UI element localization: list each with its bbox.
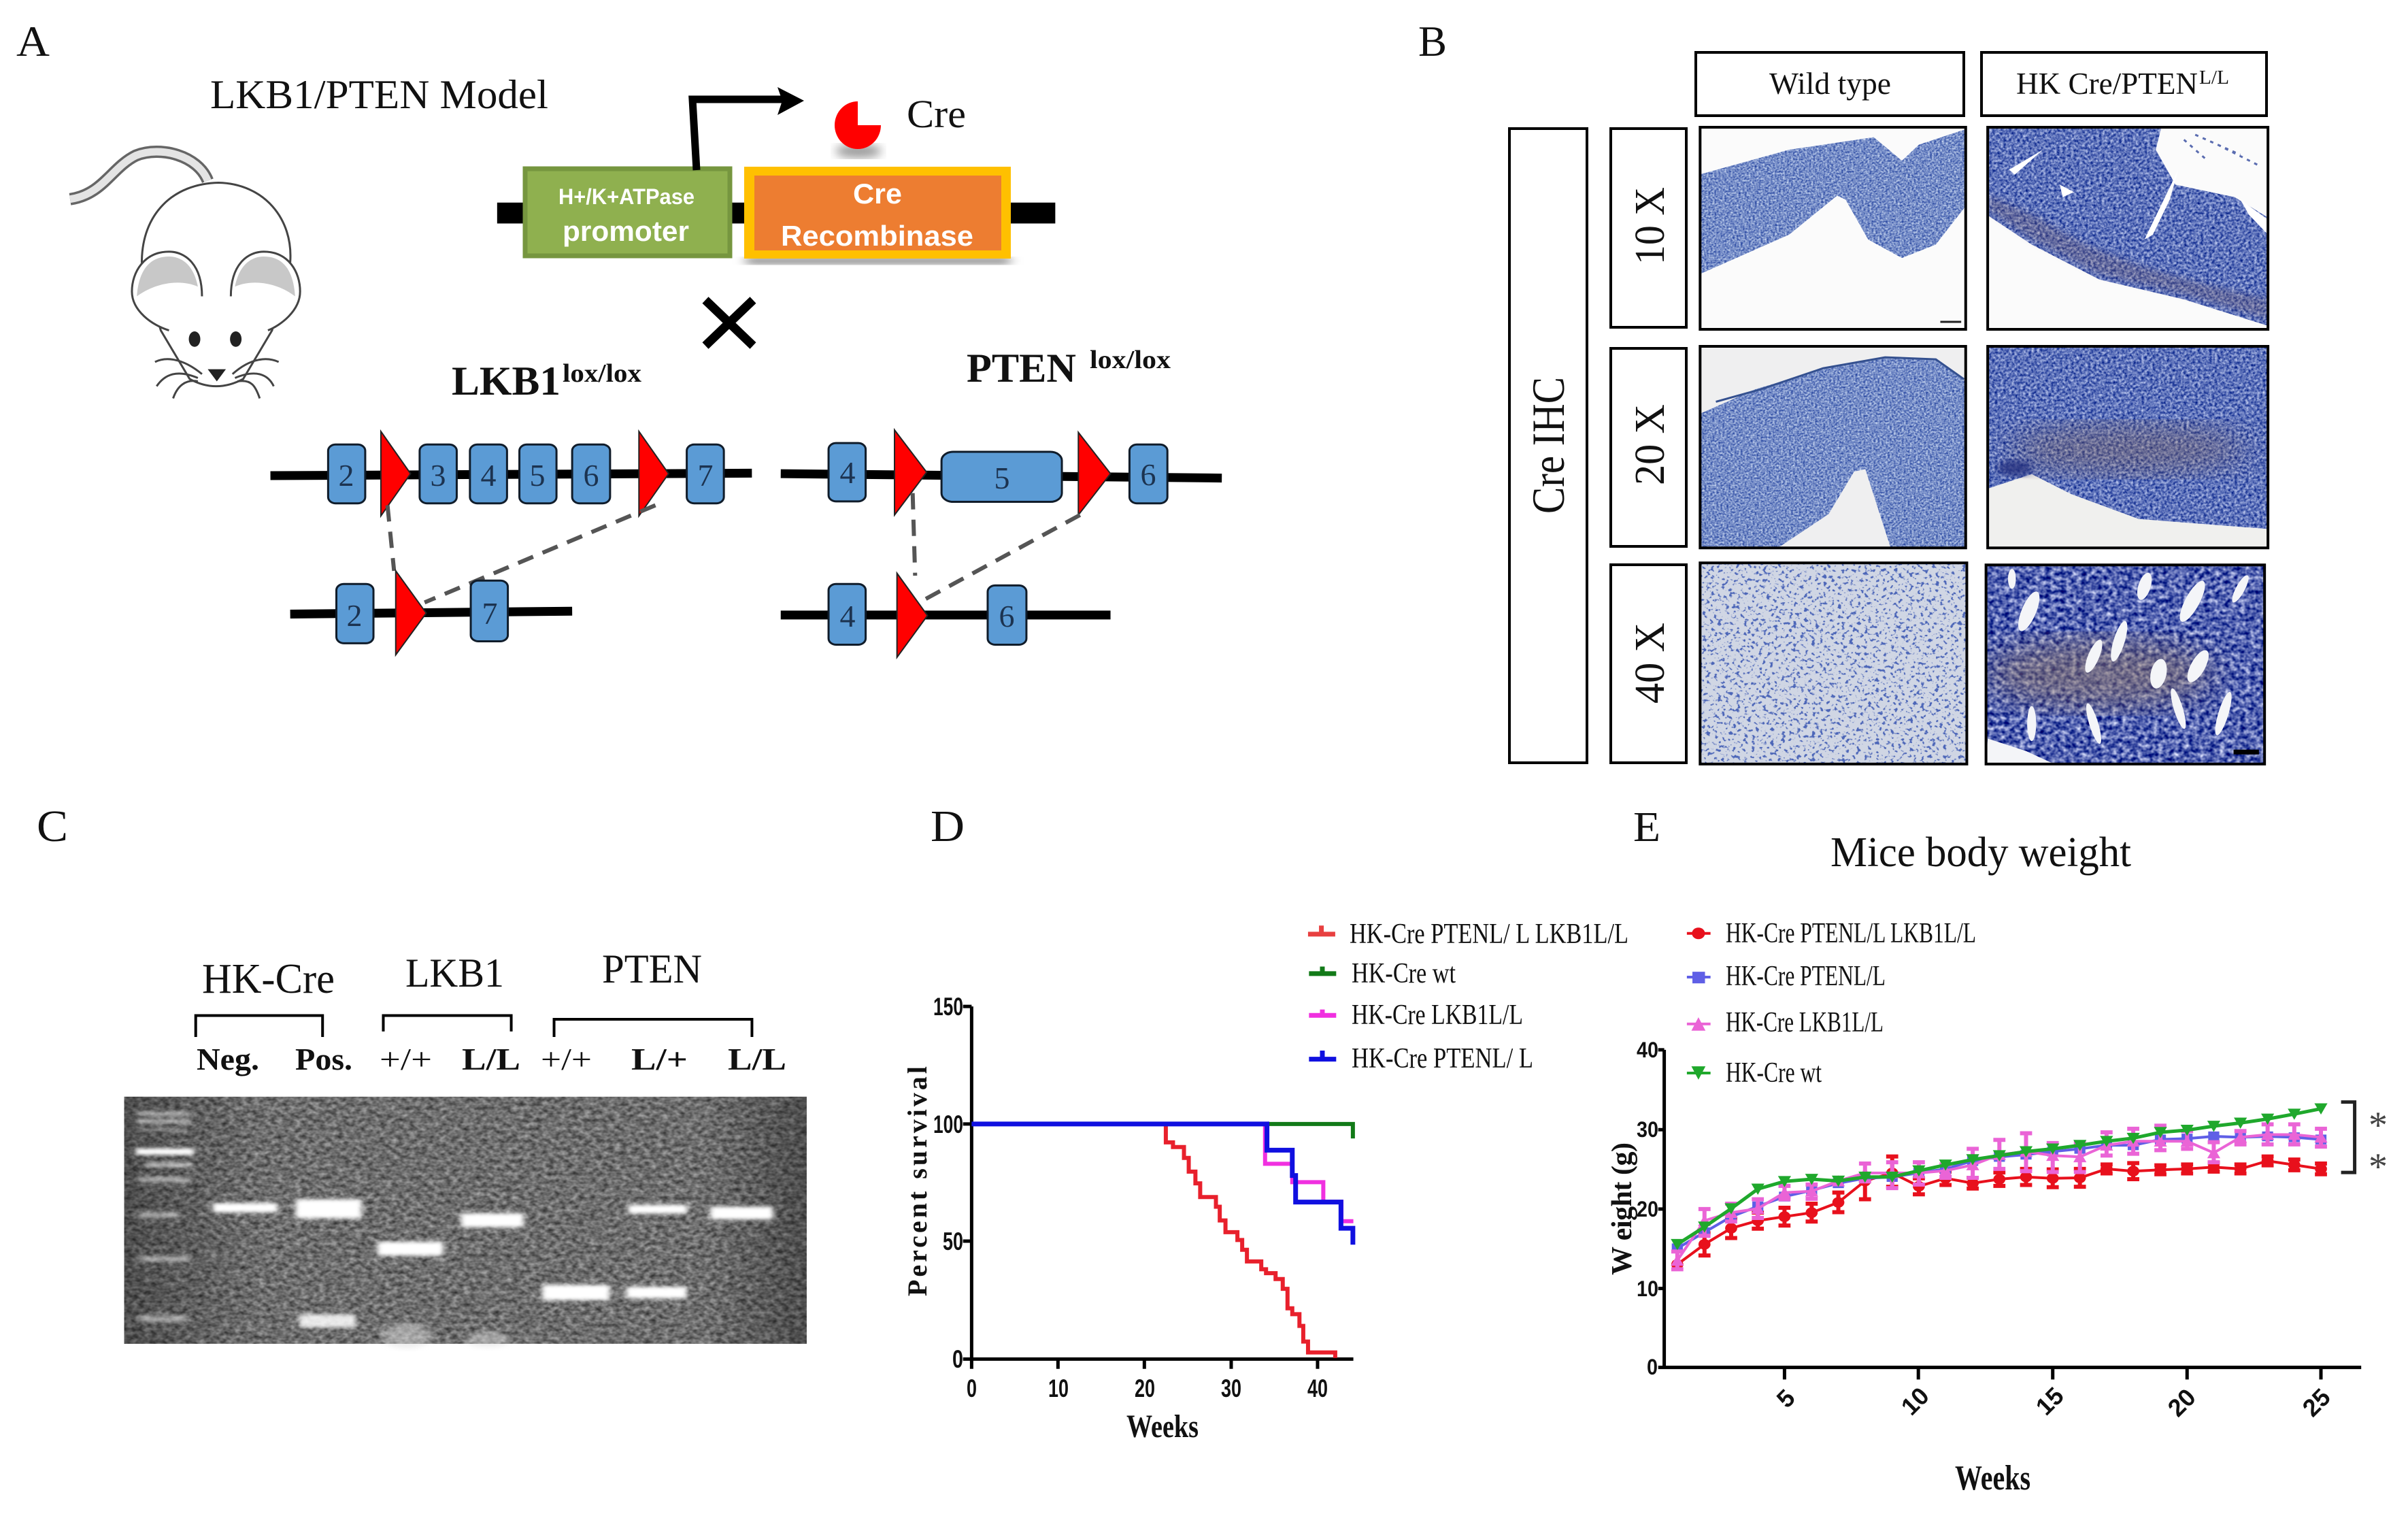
exon numbers: 6 [999,599,1015,633]
y tick labels [1637,1038,1658,1379]
column label: HK Cre/PTEN L/L: L/L [2199,67,2229,88]
icon: mouse [70,152,300,398]
micrograph: wild type 20X [1699,346,1967,548]
significance asterisks: * [2369,1104,2388,1147]
row label: 40 X: 40 X [1627,623,1673,704]
exon numbers: 6 [1140,457,1156,492]
transgene construct [497,87,1055,264]
column label: HK Cre/PTEN L/L: HK Cre/PTEN [2016,67,2198,101]
curve: HK-Cre PTEN [971,1124,1353,1245]
icon: Cre enzyme [835,101,882,158]
axis tick labels: 50 [943,1227,963,1255]
panel C: genotyping gel [37,802,807,1349]
lane labels: Neg. [197,1042,259,1076]
legend [1308,919,1628,1074]
axis tick labels: 30 [1221,1374,1241,1402]
legend: HK-Cre PTENL/ L LKB1L/L [1350,919,1628,950]
DNA ladder [135,1112,194,1322]
lane labels [197,1042,786,1076]
lane labels: Pos. [295,1042,352,1076]
diagram: PTEN recombined allele [781,574,1111,657]
legend: HK-Cre wt [1726,1057,1822,1089]
gel well glow [382,1323,509,1349]
x tick labels: 20 [2162,1383,2201,1422]
legend: HK-Cre PTENL/L LKB1L/L [1726,918,1976,949]
panel letter B: B [1418,17,1447,65]
x tick labels: 25 [2297,1383,2336,1422]
y tick labels: 0 [1647,1355,1658,1379]
row group label: Cre IHC [1509,129,1587,763]
exon numbers: 5 [529,458,546,493]
panel E: mice body weight chart [1607,804,2388,1498]
column label: HK Cre/PTEN L/L [1981,52,2267,116]
legend: HK-Cre LKB1L/L [1352,1000,1523,1031]
legend: HK-Cre PTENL/ L [1352,1043,1533,1074]
exon numbers: 7 [482,596,498,631]
group label: LKB1: LKB1 [405,951,504,995]
gel image [124,1097,807,1349]
axis tick labels: 0 [967,1374,977,1402]
y tick labels: 10 [1637,1276,1658,1301]
heading: PTEN lox/lox [967,346,1171,391]
lane labels: +/+ [380,1042,432,1076]
y axis title: Weight (g): W eight (g) [1607,1142,1638,1275]
exon numbers: 5 [994,461,1009,495]
axis tick labels: 20 [1135,1374,1155,1402]
chart axes [1658,1050,2361,1379]
y axis title: Percent survival: Percent survival [902,1066,933,1296]
heading: LKB1/PTEN Model: LKB1/PTEN Model [210,72,548,117]
x tick labels [1771,1382,2336,1422]
survival curves [971,1124,1354,1358]
panel letter C: C [37,802,68,851]
column label: Wild type: Wild type [1769,67,1891,101]
Cre recombinase box: Recombinase [781,220,973,252]
promoter box [525,169,730,256]
axis tick labels: 100 [933,1110,963,1138]
y tick labels: 20 [1637,1197,1658,1221]
arrow: transcription start [692,87,804,170]
chart axes [963,1006,1354,1369]
icon: cross symbol [705,300,753,346]
exon numbers: 3 [430,458,446,493]
panel A: LKB1/PTEN mouse model [16,17,1222,657]
axis tick labels: 0 [952,1345,963,1373]
axis tick labels: 40 [1307,1374,1328,1402]
curve: HK-Cre PTEN LKB1 [1166,1124,1335,1358]
legend: HK-Cre LKB1L/L [1726,1007,1884,1038]
x tick labels: 5 [1771,1384,1801,1413]
x tick labels: 15 [2030,1382,2069,1421]
group label: PTEN: PTEN [602,946,702,991]
y tick labels: 30 [1637,1117,1658,1142]
heading: LKB1 lox/lox: lox/lox [563,359,641,388]
group brackets [196,1016,752,1037]
column label: Wild type [1696,52,1964,116]
heading: LKB1 lox/lox [452,359,641,403]
exon numbers: 4 [839,455,856,490]
y tick labels: 40 [1637,1038,1658,1062]
exon numbers: 6 [584,458,599,493]
lane labels: +/+ [541,1042,592,1076]
significance asterisks: * [2369,1146,2388,1188]
diagram: recombination dashed lines [388,493,1080,602]
curve: HK-Cre LKB1 [1265,1124,1354,1221]
diagram: LKB1 recombined allele [290,571,572,655]
micrograph: wild type 10X [1699,127,1967,329]
x axis title: Weeks: Weeks [1126,1408,1199,1445]
panel letter A: A [16,17,50,65]
diagram: LKB1 floxed allele [271,431,752,516]
micrograph: HK Cre/PTEN 20X [1986,346,2269,548]
row label: 40 X [1611,565,1686,763]
series: HK-Cre PTEN [1677,1136,2321,1249]
micrograph: wild type 40X [1700,563,1967,764]
series: HK-Cre wt [1677,1108,2321,1245]
axis tick labels: 150 [933,993,963,1021]
exon numbers [339,455,1156,633]
legend: HK-Cre PTENL/L [1726,961,1886,992]
legend: HK-Cre wt [1352,958,1456,989]
row label: 20 X [1611,348,1686,546]
series: HK-Cre PTEN LKB1 [1677,1157,2327,1264]
axis tick labels: 10 [1048,1374,1069,1402]
significance bracket [2341,1102,2355,1172]
Cre recombinase box: Cre [853,178,902,210]
exon numbers: 4 [480,458,497,493]
promoter box: promoter [563,215,689,247]
panel D: survival curve [902,802,1628,1445]
panel B: Cre IHC histology [1418,17,2271,764]
promoter box: H+/K+ATPase [558,184,695,209]
series: HK-Cre LKB1 [1671,1124,2327,1269]
gene line segments [497,203,1055,264]
group label: HK-Cre: HK-Cre [202,956,335,1002]
diagram: PTEN floxed allele [781,430,1222,515]
heading: PTEN lox/lox: PTEN [967,346,1076,391]
row label: 10 X: 10 X [1627,187,1673,265]
axis tick labels [933,993,1328,1402]
x tick labels: 10 [1896,1382,1935,1421]
micrograph: HK Cre/PTEN 40X [1986,565,2264,764]
lane labels: L/+ [631,1042,688,1076]
significance asterisks [2369,1104,2388,1188]
exon numbers: 7 [698,458,713,493]
exon numbers: 4 [839,599,856,633]
row group label: Cre IHC: Cre IHC [1522,377,1574,514]
row label: 10 X [1611,129,1686,327]
panel letter E: E [1633,804,1660,851]
lane labels: L/L [728,1042,786,1076]
curve: HK-Cre wt [971,1124,1353,1138]
heading: LKB1 lox/lox: LKB1 [452,359,561,403]
Cre recombinase box [744,167,1011,259]
x axis title: Weeks: Weeks [1955,1459,2030,1498]
lane labels: L/L [462,1042,520,1076]
DNA bands [212,1199,773,1328]
exon numbers: 2 [347,598,362,633]
legend [1687,918,1976,1089]
heading: PTEN lox/lox: lox/lox [1090,346,1171,374]
exon numbers: 2 [339,458,354,493]
shadow under recombinase box [746,257,1010,264]
micrograph: HK Cre/PTEN 10X [1986,127,2271,329]
chart title: Mice body weight: Mice body weight [1830,829,2131,876]
label: Cre: Cre [907,92,966,136]
row label: 20 X: 20 X [1627,404,1673,485]
weight series [1671,1102,2355,1269]
panel letter D: D [931,802,965,851]
